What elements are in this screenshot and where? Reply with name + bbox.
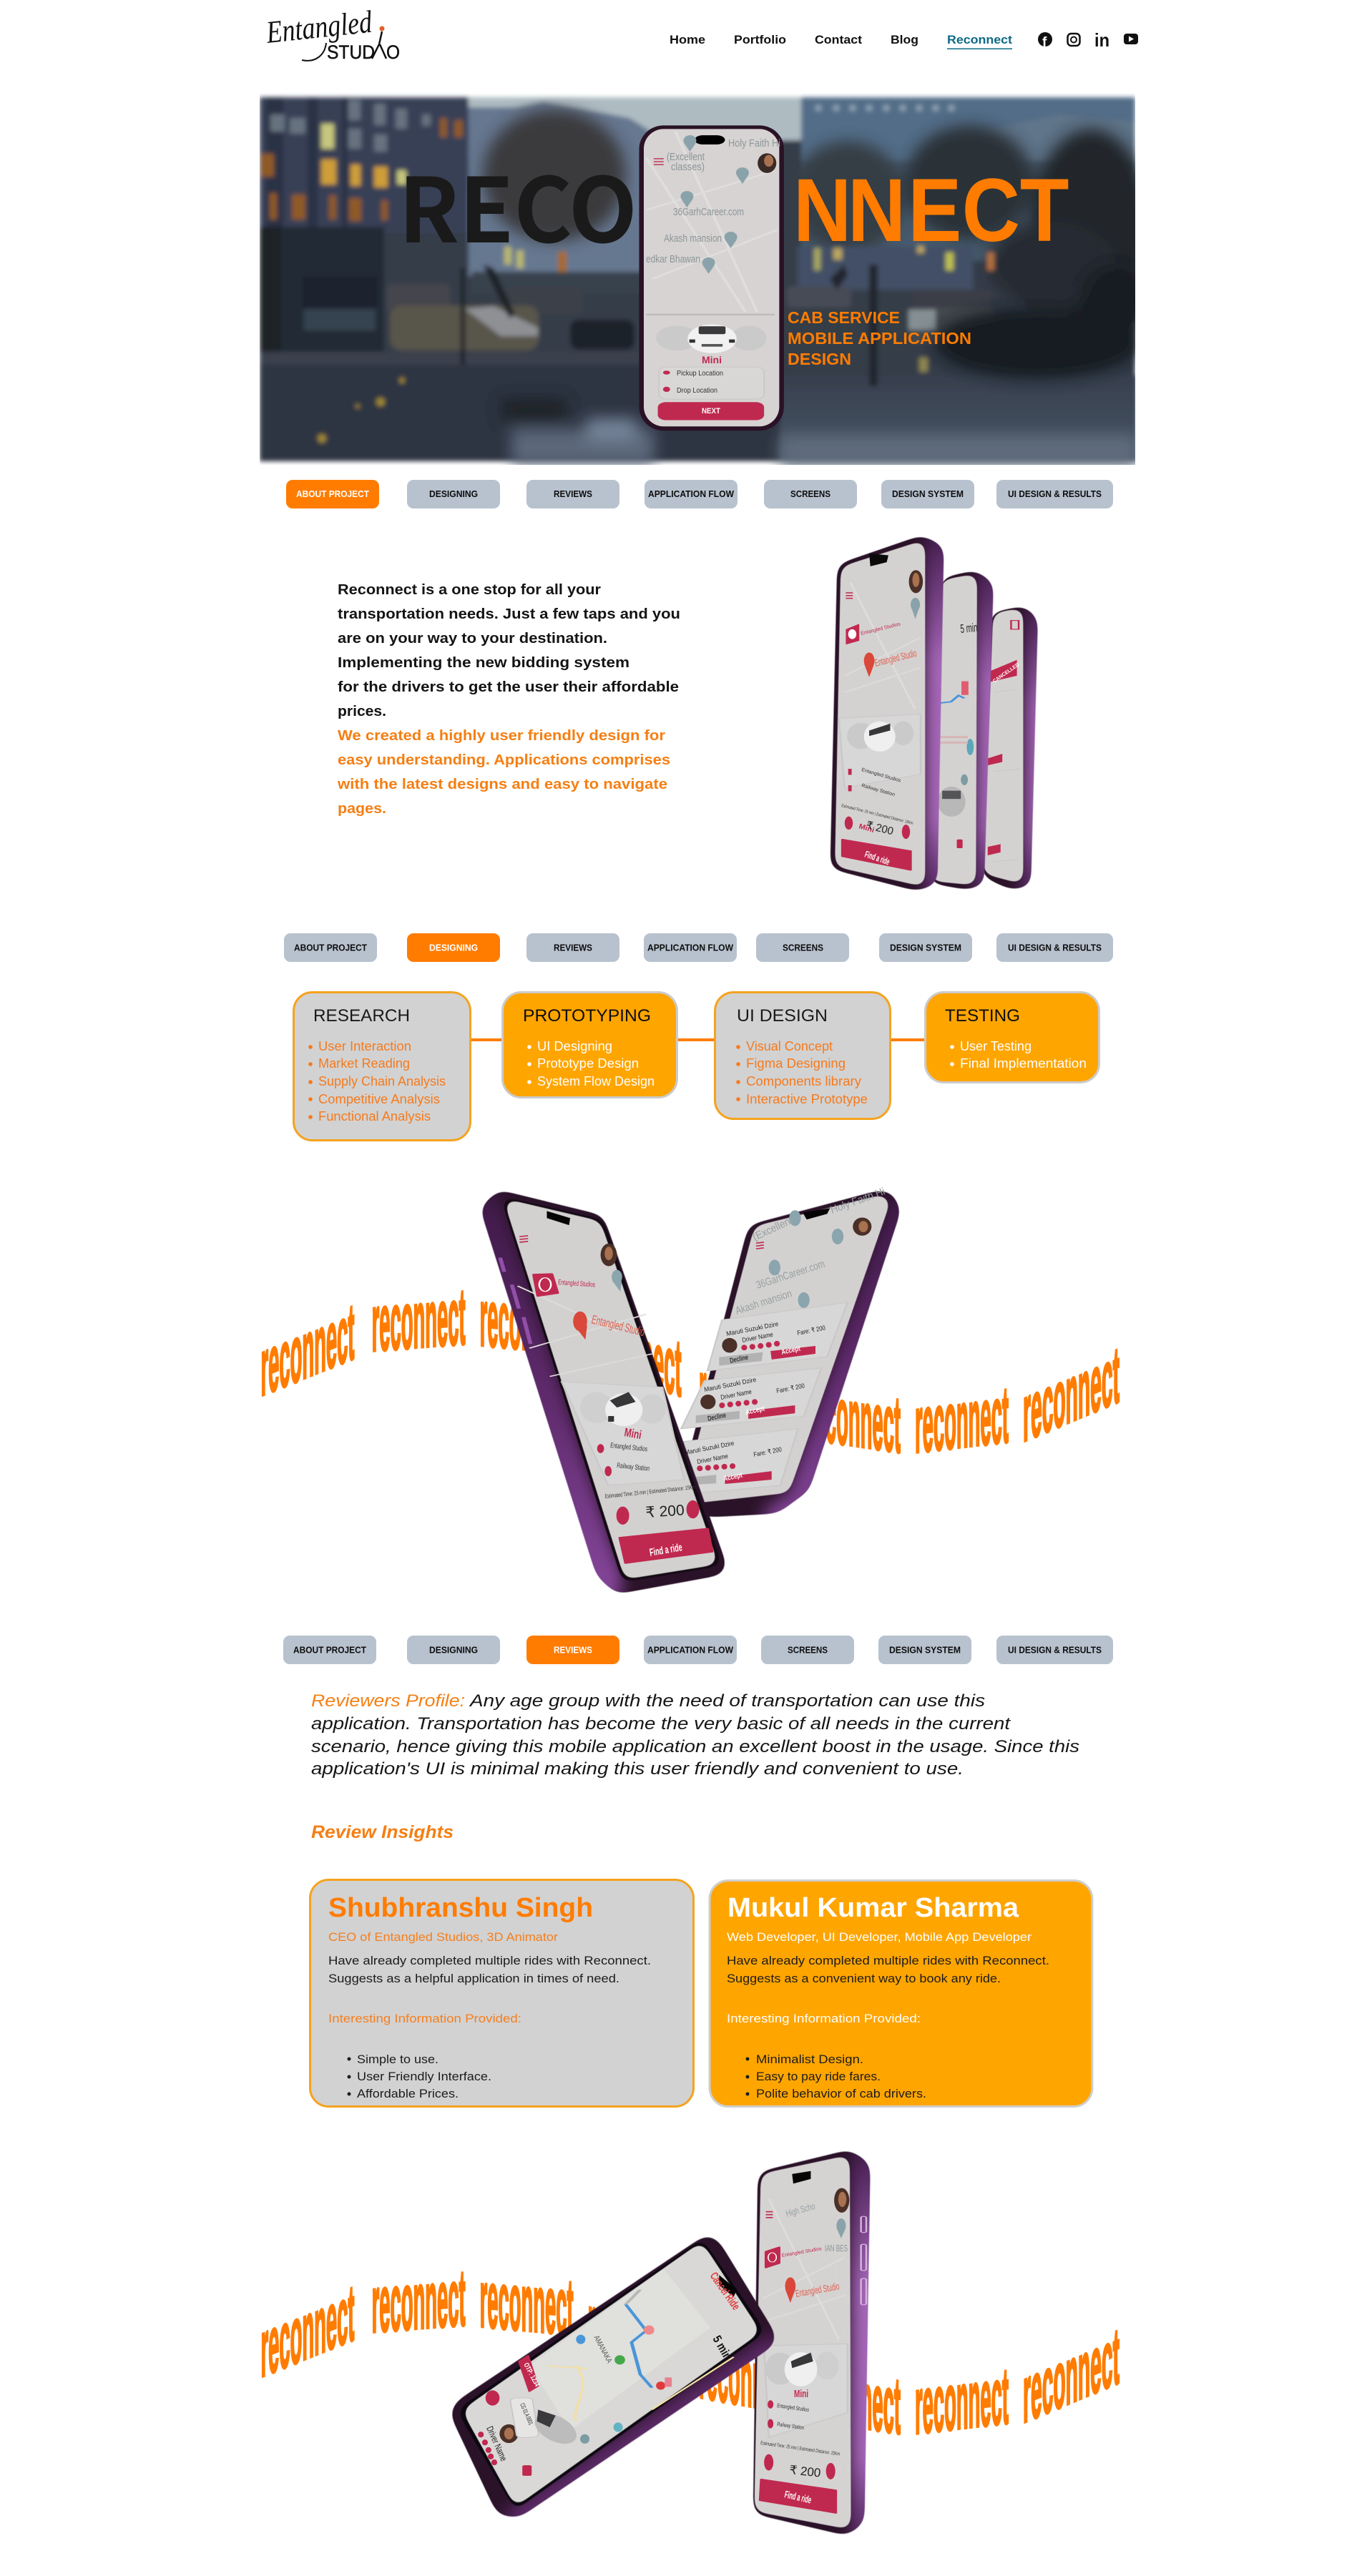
upright phone: find a ride: High Scho xyxy=(785,2201,816,2219)
review card: Shubhranshu Singh: Shubhranshu Singh xyxy=(328,1893,593,1923)
right phone: driver bids: Maruti Suzuki Dzire xyxy=(684,1440,735,1456)
panel: ui design: Visual Concept xyxy=(746,1039,833,1053)
tabs row 1 xyxy=(286,480,1113,508)
review card: Mukul Kumar Sharma: Polite behavior of cab drivers. xyxy=(756,2087,926,2100)
upright phone: find a ride: Railway Station xyxy=(777,2421,805,2431)
tabs row 3 xyxy=(283,1636,1113,1664)
left phone: find a ride: Entangled Studios xyxy=(610,1442,648,1453)
connector lines xyxy=(471,1038,924,1041)
navigation menu: Portfolio xyxy=(734,33,786,46)
wavy reconnect text band 1: reconnect xyxy=(480,1272,574,1371)
hero phone mockup: Holy Faith Hi xyxy=(728,137,780,149)
navigation menu: Blog xyxy=(891,33,918,46)
tab: design system: DESIGN SYSTEM xyxy=(890,943,961,953)
right phone: driver bids: Fare: ₹ 200 xyxy=(775,1382,805,1395)
about project text: are on your way to your destination. xyxy=(338,630,607,647)
reviewers profile paragraph xyxy=(311,1691,1079,1779)
two tilted phones xyxy=(480,1185,901,1593)
tabs row 2 xyxy=(284,933,1113,962)
right phone: driver bids: Decline xyxy=(729,1354,749,1365)
panel: prototyping: Prototype Design xyxy=(537,1056,639,1071)
tilted phone: live route map: Cancel Ride xyxy=(707,2271,742,2312)
tab: screens xyxy=(756,933,849,962)
navigation menu: Reconnect xyxy=(947,33,1012,46)
front phone: Find a ride xyxy=(863,849,891,867)
tab: about project xyxy=(283,1636,376,1664)
hero phone mockup: (Excellent xyxy=(667,151,705,163)
front phone: ₹ 200 xyxy=(865,819,895,837)
tilted phone: live route map xyxy=(450,2236,775,2517)
tab: about project (active): ABOUT PROJECT xyxy=(296,488,369,499)
tab: reviews xyxy=(526,933,619,962)
hero background: rainy street scene xyxy=(260,97,1152,467)
tab: application flow xyxy=(645,480,738,508)
upright phone: find a ride: Entangled Studio xyxy=(795,2280,841,2299)
reviewers profile paragraph: application's UI is minimal making this user friendly and convenient to use. xyxy=(311,1759,964,1779)
tilted phone: live route map: CG 01 A 0001 xyxy=(519,2402,534,2426)
review card: Shubhranshu Singh: CEO of Entangled Studios, 3D Animator xyxy=(328,1930,558,1944)
right phone: driver bids: Driver Name xyxy=(720,1388,753,1401)
wavy reconnect text band 1 xyxy=(260,1271,1119,1470)
hero title: RECO: RECO xyxy=(398,139,637,268)
review card: Shubhranshu Singh: Suggests as a helpful application in times of need. xyxy=(328,1972,619,1985)
panel: prototyping xyxy=(502,993,677,1097)
front phone: Entangled Studios xyxy=(861,621,901,636)
tab: designing xyxy=(407,480,500,508)
hero phone mockup: Drop Location xyxy=(677,387,717,395)
review card: Shubhranshu Singh: Affordable Prices. xyxy=(357,2087,459,2100)
heading: review insights: Review Insights xyxy=(311,1822,454,1842)
review card: Mukul Kumar Sharma: Have already completed multiple rides with Reconnect. xyxy=(727,1954,1049,1967)
logo: Entangled Studio: Entangled xyxy=(264,4,374,50)
logo: Entangled Studio: O xyxy=(386,41,400,63)
panel: testing: Final Implementation xyxy=(960,1056,1087,1071)
hero phone mockup: edkar Bhawan xyxy=(646,253,700,265)
tab: application flow xyxy=(644,1636,737,1664)
review card: Shubhranshu Singh: Have already completed multiple rides with Reconnect. xyxy=(328,1954,651,1967)
wavy reconnect text band 1: reconnect xyxy=(915,1369,1009,1470)
tab: ui design and results: UI DESIGN & RESULTS xyxy=(1008,943,1102,953)
tab: ui design and results: UI DESIGN & RESULTS xyxy=(1008,488,1102,499)
wavy reconnect text band 2: reconnect xyxy=(588,2277,682,2395)
middle phone: 5 min xyxy=(960,621,978,636)
panel: ui design xyxy=(715,993,890,1119)
wavy reconnect text band 2 xyxy=(260,2252,1119,2451)
front phone: Estimated Time: 25 min | Estimated Distance: 15Km xyxy=(841,804,913,826)
social icons: in xyxy=(1094,29,1109,51)
tab: reviews (active): REVIEWS xyxy=(554,1645,592,1655)
wavy reconnect text band 2: reconnect xyxy=(480,2253,574,2352)
hero phone mockup: Pickup Location xyxy=(677,370,723,378)
panel: research: User Interaction xyxy=(318,1039,411,1053)
tab: about project (active) xyxy=(286,480,379,508)
wavy reconnect text band 1: reconnect xyxy=(260,1286,355,1413)
upright phone: find a ride: ₹ 200 xyxy=(789,2463,821,2480)
tab: reviews xyxy=(526,480,619,508)
about project text: prices. xyxy=(338,703,386,719)
right phone: driver bids: Fare: ₹ 200 xyxy=(796,1324,826,1337)
tab: about project xyxy=(284,933,377,962)
panel: research xyxy=(293,993,471,1140)
wavy reconnect text band 1: reconnect xyxy=(699,1344,793,1450)
tab: design system xyxy=(878,1636,971,1664)
navigation menu: Contact xyxy=(815,33,862,46)
panel: ui design: Components library xyxy=(746,1074,861,1088)
design process flow xyxy=(293,993,1099,1140)
hero title: NNECT: NNECT xyxy=(793,161,1069,260)
right phone: driver bids: Akash mansion xyxy=(734,1287,793,1317)
hero phone mockup: NEXT xyxy=(702,407,720,416)
wavy reconnect text band 2: reconnect xyxy=(807,2348,901,2451)
panel: research: Supply Chain Analysis xyxy=(318,1074,446,1088)
left phone: find a ride: Railway Station xyxy=(617,1462,650,1473)
review card: Mukul Kumar Sharma: Mukul Kumar Sharma xyxy=(727,1893,1019,1923)
about project text xyxy=(337,581,680,817)
hero phone mockup: classes) xyxy=(671,161,705,173)
right phone: driver bids: (Excellent xyxy=(751,1214,795,1244)
tab: screens xyxy=(761,1636,854,1664)
hero banner xyxy=(260,97,1152,467)
wavy reconnect text band 1: reconnect xyxy=(807,1367,901,1470)
wavy reconnect text band 2: reconnect xyxy=(915,2350,1009,2451)
tab: application flow: APPLICATION FLOW xyxy=(648,488,735,499)
tab: screens xyxy=(764,480,857,508)
hero subtitle: CAB SERVICE xyxy=(788,308,900,327)
right phone: driver bids: 36GarhCareer.com xyxy=(755,1258,826,1292)
about project text: transportation needs. Just a few taps and you xyxy=(338,606,680,622)
upright phone: find a ride: Entangled Studios xyxy=(781,2246,823,2258)
reviewers profile paragraph: Any age group with the need of transportation can use this xyxy=(469,1691,985,1711)
about project text: with the latest designs and easy to navigate xyxy=(337,776,667,792)
hero phone mockup: Akash mansion xyxy=(664,232,722,245)
right phone: driver bids: Maruti Suzuki Dzire xyxy=(725,1320,779,1337)
bottom phones xyxy=(450,2150,870,2535)
review card: Mukul Kumar Sharma: Suggests as a convenient way to book any ride. xyxy=(727,1972,1001,1985)
reviewers profile paragraph: scenario, hence giving this mobile application an excellent boost in the usage. Since this xyxy=(311,1737,1079,1756)
upright phone: find a ride xyxy=(753,2150,870,2535)
upright phone: find a ride: Mini xyxy=(794,2388,808,2400)
navigation menu xyxy=(670,33,1012,49)
upright phone: find a ride: Find a ride xyxy=(783,2488,813,2505)
review card: Shubhranshu Singh: User Friendly Interface. xyxy=(357,2070,491,2083)
review card: Mukul Kumar Sharma: Minimalist Design. xyxy=(756,2053,863,2066)
panel: prototyping: UI Designing xyxy=(537,1039,612,1053)
panel: research: Competitive Analysis xyxy=(318,1092,440,1106)
back phone xyxy=(982,606,1037,889)
upright phone: find a ride: IAN BES xyxy=(825,2243,848,2253)
middle phone xyxy=(930,571,993,889)
hero phone mockup: 36GarhCareer.com xyxy=(673,206,744,218)
social icons xyxy=(1038,29,1138,51)
hero subtitle: DESIGN xyxy=(788,350,851,368)
review card: Shubhranshu Singh: Simple to use. xyxy=(357,2053,438,2066)
tab: designing: DESIGNING xyxy=(429,1645,478,1655)
left phone: find a ride: Entangled Studios xyxy=(558,1279,595,1289)
wavy reconnect text band 2: reconnect xyxy=(260,2267,355,2394)
tab: screens: SCREENS xyxy=(788,1645,828,1655)
panel: testing xyxy=(926,993,1099,1083)
tab: designing: DESIGNING xyxy=(429,488,478,499)
tab: design system xyxy=(881,480,974,508)
tab: screens: SCREENS xyxy=(790,488,830,499)
back phone: CANCELLED xyxy=(992,662,1021,684)
panel: research: Market Reading xyxy=(318,1056,410,1071)
tilted phone: live route map: 5 min xyxy=(710,2333,735,2362)
panel: ui design: Interactive Prototype xyxy=(746,1092,868,1106)
left phone: find a ride: Estimated Time: 25 min | Estimated Distance: 15Km xyxy=(604,1484,696,1500)
right phone: driver bids: Accept xyxy=(722,1471,744,1483)
tab: application flow: APPLICATION FLOW xyxy=(647,1645,734,1655)
panel: prototyping: System Flow Design xyxy=(537,1074,655,1088)
logo: Entangled Studio: STUD xyxy=(327,41,375,63)
reviewers profile paragraph: application. Transportation has become the very basic of all needs in the current xyxy=(311,1714,1011,1734)
about project text: Implementing the new bidding system xyxy=(338,654,629,671)
tab: reviews: REVIEWS xyxy=(554,488,592,499)
front phone: Railway Station xyxy=(861,783,896,797)
wavy reconnect text band 1: reconnect xyxy=(588,1296,682,1414)
tilted phone: live route map: Driver Name xyxy=(484,2424,509,2463)
right phone: driver bids: Driver Name xyxy=(741,1331,774,1344)
right phone: driver bids xyxy=(675,1185,901,1517)
right phone: driver bids: Driver Name xyxy=(696,1452,729,1465)
review card: Mukul Kumar Sharma: Web Developer, UI Developer, Mobile App Developer xyxy=(727,1930,1032,1944)
tab: ui design and results: UI DESIGN & RESULTS xyxy=(1008,1645,1102,1655)
tab: about project: ABOUT PROJECT xyxy=(294,943,367,953)
left phone: find a ride: Find a ride xyxy=(649,1541,683,1559)
tab: design system xyxy=(879,933,972,962)
front phone: Entangled Studios xyxy=(861,767,901,784)
panel: testing: TESTING xyxy=(945,1006,1020,1026)
panel: ui design: UI DESIGN xyxy=(737,1006,828,1026)
tab: reviews (active) xyxy=(526,1636,619,1664)
tab: design system: DESIGN SYSTEM xyxy=(892,488,964,499)
front phone: Mini xyxy=(858,822,876,835)
wavy reconnect text band 1: reconnect xyxy=(372,1271,466,1368)
panel: testing: User Testing xyxy=(960,1039,1032,1053)
hero phone mockup: Mini xyxy=(702,354,722,365)
about project text: for the drivers to get the user their affordable xyxy=(338,679,679,695)
tab: reviews: REVIEWS xyxy=(554,943,592,953)
panel: prototyping: PROTOTYPING xyxy=(523,1006,651,1026)
hero subtitle xyxy=(788,308,971,368)
tab: ui design and results xyxy=(996,933,1113,962)
reviewers profile paragraph: Reviewers Profile: xyxy=(311,1691,465,1711)
about project text: pages. xyxy=(338,800,386,817)
right phone: driver bids: Accept xyxy=(745,1405,766,1417)
left phone: find a ride: ₹ 200 xyxy=(645,1502,685,1521)
tab: designing (active): DESIGNING xyxy=(429,943,478,953)
review card: Shubhranshu Singh xyxy=(310,1879,694,2107)
tab: screens: SCREENS xyxy=(783,943,823,953)
tab: application flow xyxy=(644,933,737,962)
upright phone: find a ride: Entangled Studios xyxy=(777,2402,810,2413)
about project text: easy understanding. Applications comprises xyxy=(338,752,670,768)
right phone: driver bids: Accept xyxy=(780,1344,802,1357)
tab: designing (active) xyxy=(407,933,500,962)
three phone mockups xyxy=(830,536,1037,890)
wavy reconnect text band 2: reconnect xyxy=(699,2325,793,2431)
tab: designing xyxy=(407,1636,500,1664)
panel: ui design: Figma Designing xyxy=(746,1056,846,1071)
review card: Mukul Kumar Sharma: Interesting Information Provided: xyxy=(727,2012,921,2025)
panel: research: RESEARCH xyxy=(313,1006,410,1026)
review card: Shubhranshu Singh: Interesting Information Provided: xyxy=(328,2012,521,2025)
left phone: find a ride: Mini xyxy=(623,1425,642,1442)
navigation menu: Home xyxy=(670,33,705,46)
tab: ui design and results xyxy=(996,1636,1113,1664)
upright phone: find a ride: Estimated Time: 25 min | Estimated Distance: 15Km xyxy=(760,2441,841,2457)
review card: Mukul Kumar Sharma xyxy=(710,1881,1092,2107)
right phone: driver bids: Fare: ₹ 200 xyxy=(753,1446,783,1458)
review card: Mukul Kumar Sharma: Easy to pay ride fares. xyxy=(756,2070,881,2083)
front phone: Entangled Studio xyxy=(873,647,918,669)
hero subtitle: MOBILE APPLICATION xyxy=(788,329,971,348)
right phone: driver bids: Maruti Suzuki Dzire xyxy=(703,1376,757,1393)
tab: about project: ABOUT PROJECT xyxy=(293,1645,366,1655)
panel: research: Functional Analysis xyxy=(318,1109,431,1124)
about project text: Reconnect is a one stop for all your xyxy=(338,581,601,598)
tab: application flow: APPLICATION FLOW xyxy=(647,943,734,953)
tab: design system: DESIGN SYSTEM xyxy=(889,1645,961,1655)
front phone xyxy=(830,536,944,890)
social icons: f xyxy=(1042,35,1047,50)
right phone: driver bids: Holy Faith Hi xyxy=(829,1185,887,1216)
tilted phone: live route map: AMANAKA xyxy=(592,2334,614,2365)
tab: ui design and results xyxy=(996,480,1113,508)
about project text: We created a highly user friendly design for xyxy=(338,727,665,744)
wavy reconnect text band 2: reconnect xyxy=(372,2252,466,2349)
hero phone mockup xyxy=(639,125,784,431)
left phone: find a ride xyxy=(480,1191,727,1593)
right phone: driver bids: Decline xyxy=(707,1412,727,1423)
tilted phone: live route map: OTP: 1234 xyxy=(521,2361,541,2388)
left phone: find a ride: Entangled Studio xyxy=(590,1312,646,1339)
